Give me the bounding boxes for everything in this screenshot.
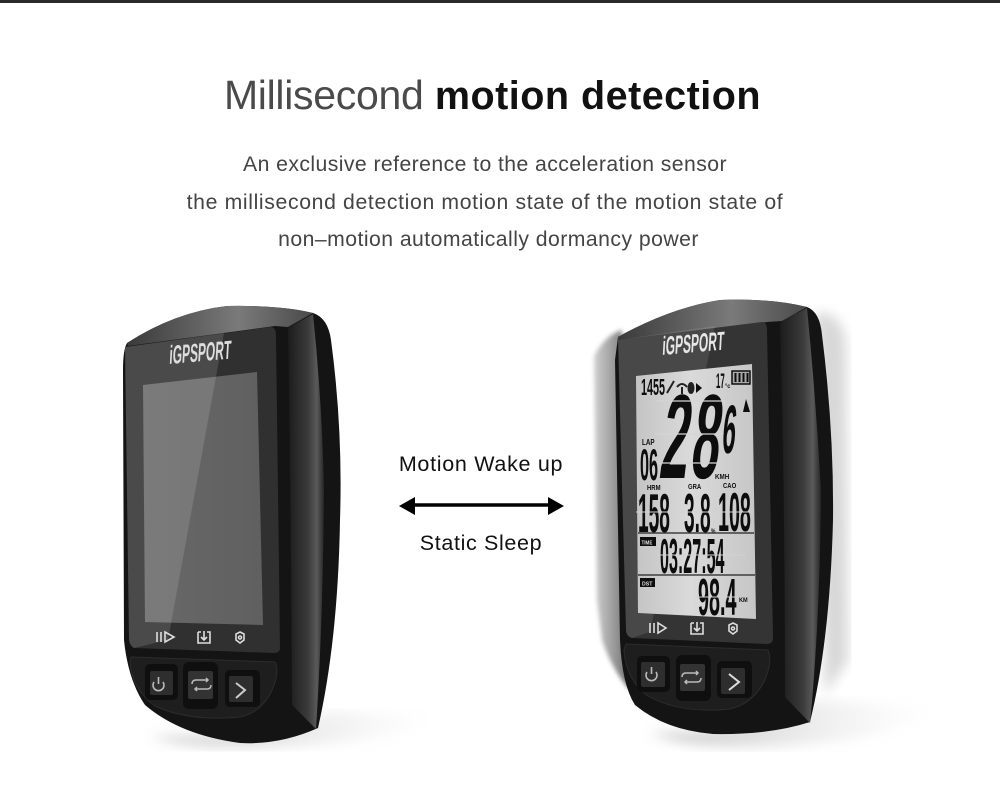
logo: iGPSPORT [662, 328, 725, 361]
glare [125, 333, 224, 648]
description text: the millisecond detection motion state of the motion state of [187, 190, 783, 214]
lcd readout [636, 369, 755, 627]
top edge [618, 300, 807, 340]
touch icons [157, 631, 244, 643]
side panel [288, 314, 324, 729]
status bar: 1455 [641, 374, 665, 400]
button cluster [130, 657, 277, 718]
speed: 2 [655, 369, 700, 504]
lcd readout: 98.4 [698, 569, 737, 627]
lcd readout: 108 [718, 482, 751, 543]
lcd screen [636, 364, 756, 619]
motion blur right [815, 312, 848, 695]
lcd readout: 3.8 [684, 483, 711, 544]
device body [123, 306, 341, 743]
floor shadow [650, 700, 930, 747]
power button [637, 656, 670, 692]
lcd readout: °c [725, 384, 731, 390]
next button [717, 661, 752, 698]
screen [143, 372, 263, 625]
lcd readout: KM [739, 598, 748, 604]
label: static sleep: Static Sleep [420, 531, 542, 555]
time row [640, 537, 656, 546]
side panel [780, 308, 821, 723]
description text: non–motion automatically dormancy power [278, 228, 699, 251]
device body [615, 300, 833, 734]
lcd readout: % [711, 529, 715, 535]
arrow: double-headed [399, 497, 564, 515]
lcd readout: DST [642, 581, 653, 588]
lcd readout: 6 [720, 390, 740, 468]
top dark strip [0, 0, 1000, 3]
second row values: 158 [638, 483, 670, 544]
lcd readout: KMH [715, 474, 729, 481]
label: motion wake up: Motion Wake up [399, 452, 563, 476]
lcd readout: 17 [716, 371, 725, 393]
power button [145, 664, 178, 700]
lap button [676, 655, 711, 701]
top edge [127, 306, 313, 346]
touch icons [650, 622, 737, 634]
device: right, awake [594, 300, 930, 747]
face bezel [618, 322, 773, 644]
distance row [640, 578, 655, 587]
face bezel [125, 327, 280, 653]
small field labels: HRM [647, 484, 661, 492]
title: Millisecond motion detection [224, 72, 761, 118]
lcd readout: TIME [642, 540, 653, 547]
description text: An exclusive reference to the acceleration sensor [243, 153, 727, 176]
floor shadow [150, 712, 430, 748]
next button [225, 670, 260, 707]
device: left, sleeping [123, 306, 430, 748]
lcd readout: 06 [640, 441, 658, 491]
lcd readout: GRA [688, 483, 701, 491]
lcd readout: 03:27:54 [660, 529, 725, 584]
glare [618, 326, 715, 638]
logo: iGPSPORT [169, 337, 232, 370]
description text [186, 153, 783, 251]
motion blur left [594, 330, 630, 690]
lap button [183, 662, 218, 709]
button cluster [624, 644, 770, 710]
lcd readout: 8 [686, 369, 730, 504]
lcd readout: CAO [723, 482, 737, 490]
lap: LAP [642, 437, 655, 447]
